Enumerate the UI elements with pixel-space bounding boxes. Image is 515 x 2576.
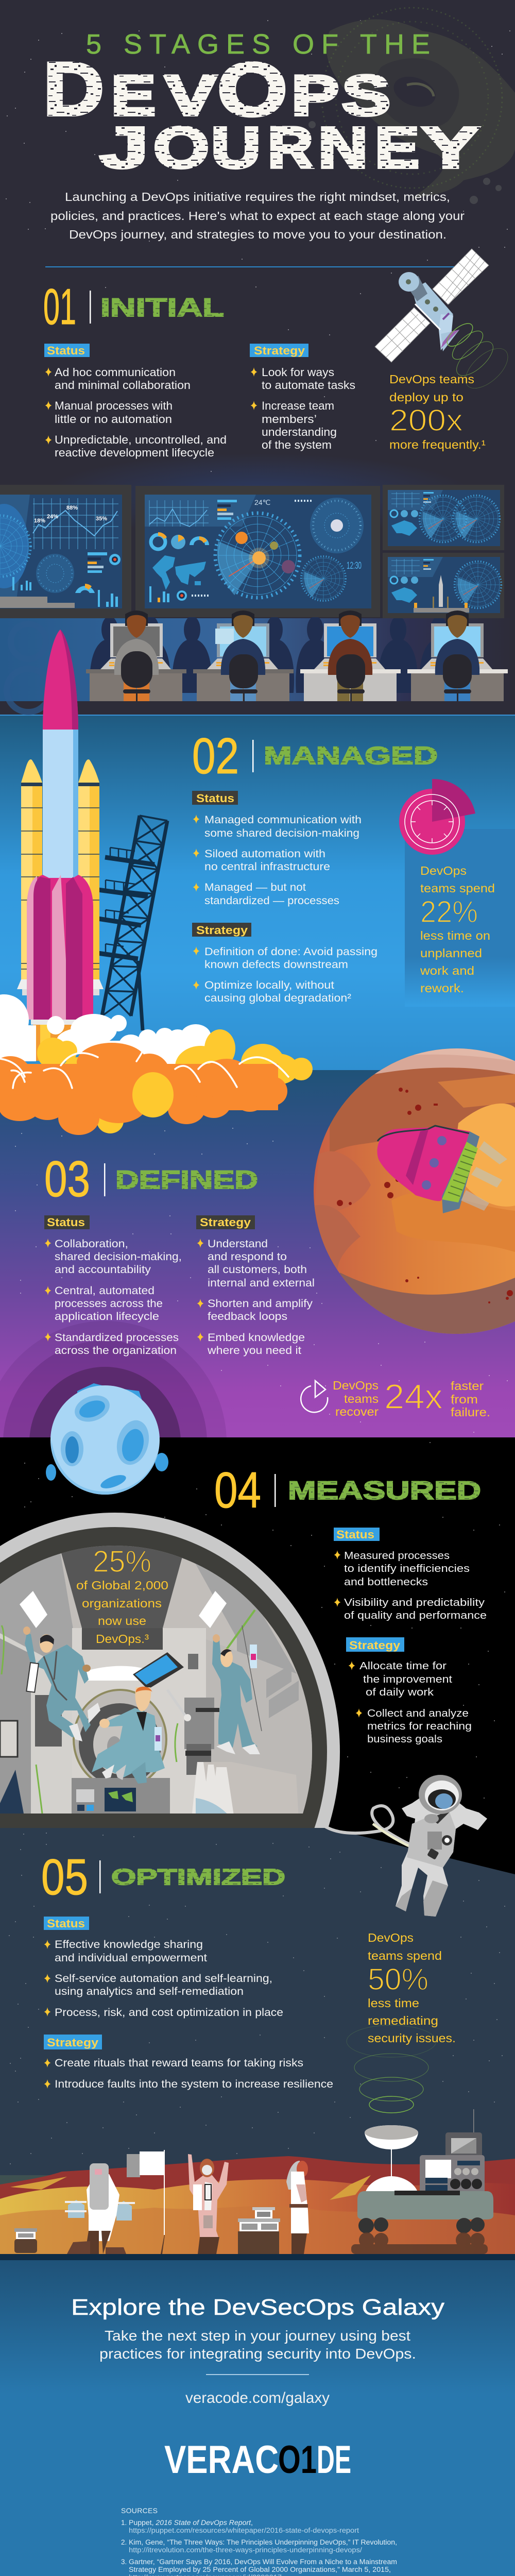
list: status items: and accountability <box>55 1264 151 1276</box>
astronaut cheering <box>188 2154 229 2254</box>
list: status items: Managed communication with <box>204 814 362 826</box>
list: status items: and bottlenecks <box>344 1577 428 1588</box>
callout: 24x faster: recover <box>335 1405 379 1418</box>
astronaut with tanks <box>65 2163 135 2254</box>
callout: 25% stat <box>76 1545 168 1646</box>
engine section <box>27 875 93 1061</box>
map <box>152 555 206 590</box>
callout panel: 22% stat: 22% <box>420 895 478 929</box>
operator 3 <box>300 611 401 701</box>
illustration: exhaust clouds <box>0 994 313 1135</box>
panel: stage 05 optimized <box>41 1849 456 2113</box>
right booster <box>78 759 99 979</box>
interior scene <box>0 1540 324 1819</box>
heading: 04 measured <box>214 1462 481 1518</box>
sources: Strategy Employed by 25 Percent of Global 2000 Organizations,” March 5, 2015, <box>129 2566 391 2573</box>
screen: center <box>135 486 380 617</box>
screen: center: 24℃ <box>254 498 270 506</box>
list: status items: little or no automation <box>55 413 172 426</box>
callout: deploy 200x <box>389 372 486 451</box>
list: status items: reactive development lifecycle <box>55 446 214 459</box>
list: status items: standardized — processes <box>204 895 339 907</box>
callout: 50% stat: remediating <box>368 2014 438 2027</box>
callout: deploy 200x: 200x <box>389 403 463 437</box>
callout: deploy 200x: DevOps teams <box>389 372 474 386</box>
list: strategy items: Allocate time for <box>359 1660 447 1672</box>
orange fire <box>0 1043 287 1135</box>
list: strategy items: Optimize locally, without <box>204 979 334 991</box>
label: status: Status <box>336 1528 374 1541</box>
divider: blue rule <box>45 266 455 267</box>
callout: 25% stat: of Global 2,000 <box>76 1579 168 1592</box>
link text: veracode.com/galaxy <box>185 2389 330 2406</box>
label: strategy <box>44 2035 102 2049</box>
heading: 04 measured: MEASURED <box>288 1476 481 1505</box>
label: strategy: Strategy <box>349 1639 401 1652</box>
list: strategy items: Increase team <box>262 399 334 412</box>
ceiling panel <box>61 1546 182 1628</box>
sources: 1. <box>121 2519 127 2527</box>
list: strategy items: of daily work <box>366 1687 434 1698</box>
heading: 01 initial <box>43 278 224 335</box>
yellow billows <box>37 1029 313 1133</box>
callout: 50% stat: DevOps <box>368 1931 414 1944</box>
title: Journey <box>100 115 479 180</box>
operator 4 <box>407 611 508 701</box>
title: DevOps <box>43 47 390 131</box>
panel: stage 01 initial <box>43 278 486 459</box>
label: status <box>192 791 238 805</box>
list: strategy items: to automate tasks <box>262 379 355 392</box>
background: optimized section <box>0 1828 515 2254</box>
divider: blue line above managed <box>0 715 515 716</box>
screen: left: 24% <box>47 514 58 520</box>
crates <box>203 1762 298 1814</box>
left booster <box>21 759 42 979</box>
list: status items <box>193 814 362 907</box>
console <box>72 1778 170 1814</box>
callout panel: 22% stat: rework. <box>420 981 464 995</box>
text block: next step: Take the next step in your journey using best <box>105 2328 410 2344</box>
list: status items: some shared decision-making <box>204 827 359 839</box>
callout: 25% stat: organizations <box>82 1597 162 1610</box>
sources: http://itrevolution.com/the-three-ways-principles-underpinning-devops/ <box>129 2546 362 2554</box>
list: status items: shared decision-making, <box>55 1251 182 1263</box>
illustration: mission control room <box>0 485 515 712</box>
helmet <box>419 1775 462 1814</box>
list: status items: processes across the <box>55 1298 163 1310</box>
heading: 04 measured: 04 <box>214 1462 261 1518</box>
list: strategy items <box>250 366 355 451</box>
title: Journey: Y <box>422 115 479 180</box>
sources: Kim, Gene, “The Three Ways: The Principles Underpinning DevOps,” IT Revolution, <box>129 2538 397 2546</box>
title: DevOps: O <box>217 47 287 131</box>
label: status: Status <box>47 1216 85 1229</box>
title: Journey: J <box>100 115 148 180</box>
white smoke <box>0 994 211 1066</box>
icon: satellite <box>375 249 515 396</box>
callout panel: 22% stat: less time on <box>420 929 490 942</box>
callout: 25% stat: now use <box>98 1614 146 1628</box>
callout: 50% stat: teams spend <box>368 1949 442 1962</box>
panel: footer <box>45 2295 471 2576</box>
list: strategy items: understanding <box>262 426 337 438</box>
screen: left: 35% <box>96 516 107 522</box>
list: status items <box>334 1550 487 1621</box>
callout: 50% stat: less time <box>368 1996 419 2010</box>
window frame <box>0 1513 340 1828</box>
background: managed section <box>0 715 515 1070</box>
list: strategy items <box>197 1238 315 1357</box>
list: strategy items: all customers, both <box>208 1264 307 1276</box>
list: status items: Self-service automation and self-learning, <box>55 1973 272 1985</box>
heading: 03 defined: 03 <box>44 1150 90 1207</box>
illustration: spaceship over Mars <box>377 1126 507 1213</box>
back wall <box>0 618 515 701</box>
title: DevOps: D <box>43 47 104 131</box>
background: measured section black <box>0 1437 515 1874</box>
heading: 03 defined: DEFINED <box>115 1165 258 1194</box>
rover with dish <box>351 2109 493 2254</box>
white ceiling lights <box>20 1591 47 1628</box>
background: footer <box>0 2260 515 2576</box>
illustration: moon <box>46 1383 168 1497</box>
core stage <box>43 630 78 879</box>
screen: right bottom <box>383 553 504 618</box>
logo: Veracode: DE <box>317 2438 351 2482</box>
illustration: Mars planet <box>309 1046 515 1340</box>
sources: Gartner, “Gartner Says By 2016, DevOps Will Evolve From a Niche to a Mainstream <box>129 2558 397 2566</box>
list: strategy items: Collect and analyze <box>367 1708 469 1719</box>
astronaut left <box>23 1626 100 1741</box>
list: status items: and individual empowerment <box>55 1952 207 1964</box>
heading: 03 defined <box>44 1150 258 1207</box>
heading: 05 optimized: OPTIMIZED <box>111 1865 285 1890</box>
callout: 25% stat: 25% <box>93 1545 151 1579</box>
icon: signal rings <box>347 2025 436 2113</box>
list: status items: Managed — but not <box>204 882 306 893</box>
title: Journey: U <box>211 115 261 180</box>
list: status items: using analytics and self-remediation <box>55 1986 244 1997</box>
screen: center: 12:30 <box>347 561 362 571</box>
title: Journey: E <box>375 115 419 180</box>
screen: left <box>0 485 131 618</box>
suit <box>396 1798 487 1917</box>
white highlight arcs <box>0 1048 288 1088</box>
label: strategy: Strategy <box>47 2036 99 2049</box>
tablet <box>133 1652 184 1689</box>
gears pattern <box>7 624 50 712</box>
list: status items: Siloed automation with <box>204 848 325 860</box>
intro paragraph <box>50 190 465 241</box>
background: blue glow above control room <box>41 453 474 536</box>
list: strategy items: Understand <box>208 1238 268 1250</box>
screen: left: 18% <box>34 518 45 524</box>
list: status items <box>44 1238 182 1357</box>
illustration: moon halo <box>0 1321 227 1437</box>
intro paragraph: Launching a DevOps initiative requires the right mindset, metrics, <box>65 190 450 204</box>
icon: clock <box>399 779 475 855</box>
list: status items: Effective knowledge sharing <box>55 1939 203 1951</box>
list: status items: Measured processes <box>344 1550 450 1562</box>
panel: stage 04 measured <box>214 1462 487 1745</box>
silhouettes of staff <box>90 616 459 693</box>
background: intro section <box>0 0 515 715</box>
callout: 24x faster: teams <box>344 1392 379 1405</box>
list: status items: Process, risk, and cost optimization in place <box>55 2007 283 2019</box>
title: DevOps: S <box>342 64 390 127</box>
text block: next step <box>99 2328 416 2362</box>
text block: next step: practices for integrating security into DevOps. <box>99 2346 416 2362</box>
list: status items: of quality and performance <box>344 1610 487 1621</box>
illustration: station window <box>0 1513 340 1828</box>
callout: 24x faster: from <box>451 1393 478 1406</box>
list: status items: Ad hoc communication <box>55 366 176 379</box>
label: status: Status <box>47 344 85 357</box>
list: strategy items: Embed knowledge <box>208 1332 305 1344</box>
callout: 50% stat: security issues. <box>368 2031 456 2045</box>
astronaut right <box>212 1625 262 1754</box>
illustration: planet surface <box>0 2109 515 2260</box>
sources <box>121 2506 397 2576</box>
title: 5 stages of the: 5 STAGES OF THE <box>86 29 430 60</box>
title: Journey: N <box>318 115 368 180</box>
callout panel: 22% stat: teams spend <box>420 882 495 895</box>
list: strategy items: members’ <box>262 413 317 426</box>
list: strategy items <box>193 946 377 1004</box>
sources: 2. <box>121 2538 127 2546</box>
list: status items: and minimal collaboration <box>55 379 191 392</box>
title <box>43 29 479 180</box>
label: status: Status <box>47 1917 85 1930</box>
callout: 24x faster <box>301 1377 490 1419</box>
illustration: launch tower <box>98 816 167 1030</box>
airlock ring <box>73 1689 167 1778</box>
title: DevOps: V <box>165 64 216 127</box>
screen: right top <box>383 485 504 550</box>
callout: 50% stat <box>368 1931 456 2045</box>
heading: Explore the DevSecOps Galaxy: Explore the DevSecOps Galaxy <box>71 2295 444 2320</box>
logo: Veracode: VERAC <box>164 2438 279 2482</box>
list: status items: across the organization <box>55 1345 177 1357</box>
title: DevOps: P <box>291 64 339 127</box>
label: strategy: Strategy <box>200 1216 251 1229</box>
label: strategy: Strategy <box>196 924 248 937</box>
panel: stage 02 managed <box>192 727 515 1007</box>
callout panel: 22% stat <box>399 779 515 1007</box>
icon: recovery arrow <box>301 1381 328 1412</box>
callout panel: 22% stat: DevOps <box>420 864 467 877</box>
list: strategy items <box>348 1660 472 1745</box>
list: strategy items: Create rituals that reward teams for taking risks <box>55 2057 303 2069</box>
list: status items <box>44 1939 283 2019</box>
list: status items: no central infrastructure <box>204 861 330 873</box>
callout: 50% stat: 50% <box>368 1962 428 1996</box>
heading: 05 optimized <box>41 1849 285 1905</box>
list: strategy items: where you need it <box>207 1345 301 1357</box>
starfield <box>6 21 510 471</box>
list: strategy items: the improvement <box>363 1674 452 1685</box>
panel: stage 03 defined <box>44 1150 490 1419</box>
tether <box>323 1806 422 1850</box>
sources: SOURCES <box>121 2506 158 2515</box>
heading: 02 managed <box>192 727 438 784</box>
logo: Veracode: O1 <box>278 2438 317 2482</box>
callout panel: 22% stat: unplanned <box>420 946 482 960</box>
astronaut middle <box>92 1687 165 1784</box>
list: strategy items: Look for ways <box>262 366 334 379</box>
background: defined section <box>0 1070 515 1437</box>
list: strategy items: Introduce faults into the system to increase resilience <box>55 2078 333 2090</box>
flag <box>127 2150 165 2254</box>
list: status items: Collaboration, <box>55 1238 128 1250</box>
callout: deploy 200x: deploy up to <box>389 391 464 404</box>
illustration: spacewalking astronaut <box>323 1775 487 1917</box>
callout: 24x faster: failure. <box>451 1405 490 1419</box>
callout: deploy 200x: more frequently.¹ <box>389 438 486 451</box>
list: strategy items: Shorten and amplify <box>208 1298 313 1310</box>
list: strategy items: known defects downstream <box>204 959 348 971</box>
list: strategy items: of the system <box>262 438 332 451</box>
divider <box>206 2374 309 2375</box>
heading: 01 initial: INITIAL <box>100 293 224 322</box>
list: strategy items <box>44 2057 333 2090</box>
operator 1 <box>86 611 186 701</box>
label: strategy <box>346 1637 404 1652</box>
heading: 02 managed: MANAGED <box>264 742 438 770</box>
list: status items: Manual processes with <box>55 399 173 412</box>
callout: 24x faster: 24x <box>384 1377 443 1416</box>
list: strategy items: and respond to <box>208 1251 287 1263</box>
title: Journey: R <box>268 115 313 180</box>
astronaut with backpack <box>286 2161 309 2254</box>
list: status items: to identify inefficiencies <box>344 1563 470 1574</box>
list: status items: Visibility and predictability <box>344 1597 485 1608</box>
list: strategy items: feedback loops <box>208 1311 287 1323</box>
callout: 24x faster: faster <box>451 1379 484 1393</box>
sources: Puppet, 2016 State of DevOps Report , <box>129 2519 253 2527</box>
title: Journey: O <box>153 115 209 180</box>
illustration: rocket <box>17 630 104 1061</box>
list: strategy items: metrics for reaching <box>367 1721 472 1732</box>
list: strategy items: internal and external <box>208 1277 315 1289</box>
list: strategy items: causing global degradation² <box>204 992 351 1004</box>
list: strategy items: Definition of done: Avoid passing <box>204 946 377 958</box>
callout panel: 22% stat: work and <box>420 964 474 977</box>
heading: 05 optimized: 05 <box>41 1849 88 1905</box>
screen: left: 88% <box>66 505 78 511</box>
crates <box>14 2207 280 2254</box>
heading: 01 initial: 01 <box>43 278 76 335</box>
list: status items: Central, automated <box>55 1285 154 1297</box>
list: status items <box>45 366 227 459</box>
callout: 25% stat: DevOps.³ <box>96 1632 149 1646</box>
operator 2 <box>193 611 294 701</box>
sources: 3. <box>121 2558 127 2566</box>
list: strategy items: business goals <box>367 1734 442 1745</box>
label: strategy: Strategy <box>254 344 305 357</box>
callout: 24x faster: DevOps <box>333 1379 379 1392</box>
title: DevOps: E <box>111 64 156 127</box>
galaxy swirl behind title <box>308 8 515 204</box>
sources: https://puppet.com/resources/whitepaper/2016-state-of-devops-report <box>129 2527 359 2534</box>
intro paragraph: policies, and practices. Here's what to expect at each stage along your <box>50 209 465 223</box>
list: status items: application lifecycle <box>55 1311 159 1323</box>
list: status items: Standardized processes <box>55 1332 179 1344</box>
heading: 02 managed: 02 <box>192 727 239 784</box>
label: status: Status <box>196 792 234 805</box>
intro paragraph: DevOps journey, and strategies to move you to your destination. <box>69 228 447 241</box>
list: status items: Unpredictable, uncontrolled, and <box>55 433 227 446</box>
